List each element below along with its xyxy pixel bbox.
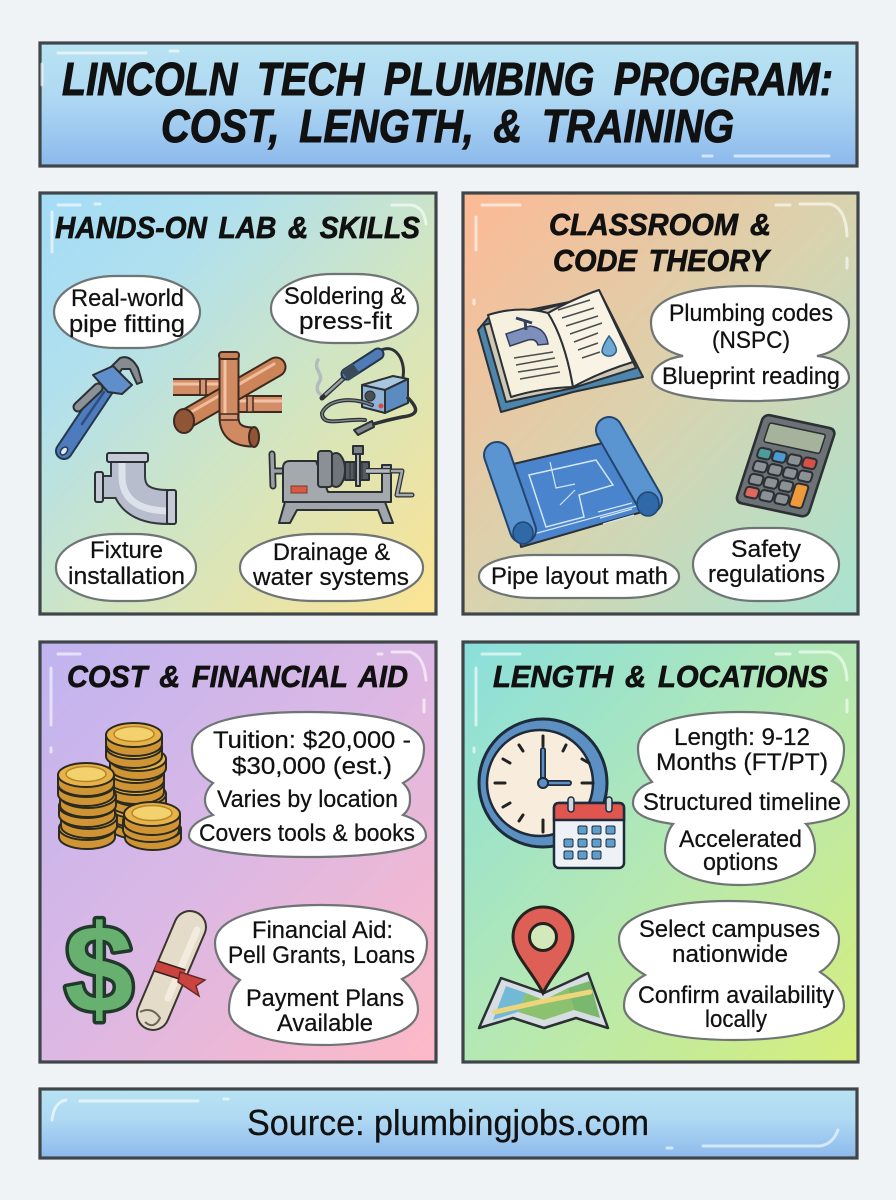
bubble: real-world pipe fitting (54, 276, 200, 348)
icon: calendar (554, 797, 624, 868)
bubble: campuses and availability: nationwide (672, 941, 788, 968)
bubble: financial aid and payment plans: Financial Aid: (252, 917, 393, 944)
heading: classroom and code theory: CLASSROOM & (549, 207, 771, 242)
heading: classroom and code theory (549, 207, 772, 278)
bubble: plumbing codes and blueprint reading: Blueprint reading (662, 363, 840, 390)
bubble: fixture installation: installation (68, 563, 185, 590)
icon: blueprint roll (497, 430, 659, 547)
bubble: campuses and availability (619, 901, 844, 1040)
bubble: pipe layout math: Pipe layout math (491, 563, 668, 590)
icon: folded map (479, 973, 608, 1028)
heading: classroom and code theory: CODE THEORY (553, 243, 772, 278)
icon: green dollar sign: $ (65, 901, 133, 1039)
bubble: tuition, varies, covers: Varies by location (217, 786, 398, 813)
icon: water drop on book page (602, 336, 616, 356)
heading: hands-on lab: HANDS-ON LAB & SKILLS (55, 210, 420, 245)
bubble: plumbing codes and blueprint reading: (NSPC) (712, 327, 790, 354)
icon: coin stacks (58, 723, 181, 850)
bubble: tuition, varies, covers (189, 712, 426, 857)
title text: COST, LENGTH, & TRAINING (161, 100, 734, 152)
bubble: length, timeline, accelerated: options (703, 849, 778, 876)
bubble: plumbing codes and blueprint reading (651, 286, 849, 401)
source text: Source: plumbingjobs.com (247, 1102, 649, 1143)
bubble: financial aid and payment plans: Payment Plans (246, 985, 404, 1012)
bubble: financial aid and payment plans (215, 905, 427, 1045)
bubble: tuition, varies, covers: Covers tools & books (199, 820, 415, 847)
bubble: safety regulations: Safety (731, 536, 801, 563)
icon: pipe threading machine (272, 446, 412, 523)
bubble: length, timeline, accelerated: Accelerated (679, 826, 802, 853)
bubble: length, timeline, accelerated (633, 712, 849, 885)
bubble: pipe layout math (479, 555, 679, 598)
panel: classroom and code theory (463, 193, 858, 614)
panel: length and locations (463, 642, 858, 1062)
bubble: soldering and press-fit: Soldering & (284, 283, 406, 310)
bubble: drainage and water systems: Drainage & (273, 539, 390, 566)
bubble: length, timeline, accelerated: Length: 9-12 (674, 724, 810, 751)
heading: cost and financial aid: COST & FINANCIAL AID (67, 659, 408, 694)
bubble: fixture installation: Fixture (90, 537, 163, 564)
icon: copper pipes (173, 352, 282, 447)
bubble: real-world pipe fitting: Real-world (71, 285, 184, 312)
icon: faucet on book page (506, 318, 548, 346)
bubble: campuses and availability: locally (705, 1006, 767, 1033)
bubble: length, timeline, accelerated: Months (FT/PT) (656, 749, 828, 776)
bubble: tuition, varies, covers: $30,000 (est.) (232, 753, 392, 780)
title banner (40, 43, 857, 166)
bubble: fixture installation (56, 534, 196, 601)
bubble: tuition, varies, covers: Tuition: $20,000 - (213, 727, 411, 754)
bubble: real-world pipe fitting: pipe fitting (69, 311, 185, 338)
bubble: plumbing codes and blueprint reading: Plumbing codes (669, 300, 833, 327)
icon: steel elbow fitting (95, 453, 176, 524)
bubble: soldering and press-fit: press-fit (299, 308, 392, 335)
bubble: length, timeline, accelerated: Structured timeline (643, 789, 841, 816)
icon: wall clock (479, 719, 607, 847)
heading: length and locations: LENGTH & LOCATIONS (493, 659, 828, 694)
bubble: drainage and water systems: water systems (252, 564, 409, 591)
bubble: soldering and press-fit (271, 274, 418, 343)
icon: open book (478, 290, 643, 412)
bubble: safety regulations (693, 528, 839, 601)
icon: red location pin (513, 907, 573, 993)
source banner (40, 1089, 857, 1158)
bubble: financial aid and payment plans: Available (277, 1010, 373, 1037)
icon: pipe wrench (59, 357, 142, 456)
bubble: drainage and water systems (240, 534, 423, 601)
panel: hands-on lab and skills (40, 193, 436, 614)
bubble: campuses and availability: Select campuses (639, 916, 820, 943)
icon: soldering station (316, 349, 416, 435)
bubble: safety regulations: regulations (708, 561, 825, 588)
panel: cost and financial aid (40, 642, 436, 1062)
icon: calculator (735, 414, 836, 517)
bubble: financial aid and payment plans: Pell Grants, Loans (228, 942, 415, 969)
bubble: campuses and availability: Confirm availability (638, 982, 834, 1009)
title text (62, 53, 833, 152)
icon: rolled diploma (140, 927, 205, 1025)
